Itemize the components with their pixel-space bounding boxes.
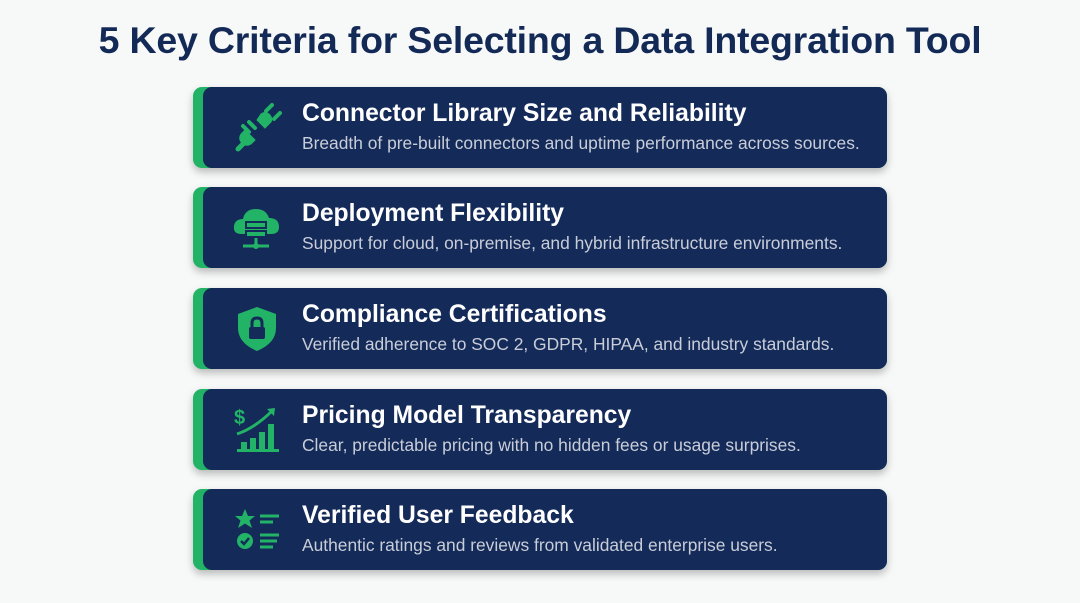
- heading: Verified User Feedback: [302, 502, 574, 529]
- title: 5 Key Criteria for Selecting a Data Integration Tool: [99, 19, 981, 61]
- description: Authentic ratings and reviews from validated enterprise users.: [302, 535, 778, 555]
- description: Breadth of pre-built connectors and uptime performance across sources.: [302, 133, 860, 153]
- description: Verified adherence to SOC 2, GDPR, HIPAA, and industry standards.: [302, 334, 834, 354]
- icon: cloud server: [234, 209, 279, 249]
- heading: Deployment Flexibility: [302, 200, 564, 227]
- card: connector library: [193, 87, 887, 168]
- description: Clear, predictable pricing with no hidden fees or usage surprises.: [302, 435, 801, 455]
- icon: dollar chart: [234, 407, 279, 452]
- heading: Compliance Certifications: [302, 301, 607, 328]
- card: feedback: [193, 489, 887, 570]
- heading: Pricing Model Transparency: [302, 402, 631, 429]
- card: compliance: [193, 288, 887, 369]
- card: deployment: [193, 187, 887, 268]
- heading: Connector Library Size and Reliability: [302, 100, 746, 127]
- icon: shield lock: [238, 307, 276, 351]
- icon: dollar chart: $: [234, 407, 245, 429]
- icon: star and check list: [235, 509, 279, 549]
- description: Support for cloud, on-premise, and hybrid infrastructure environments.: [302, 233, 842, 253]
- card: pricing: [193, 389, 887, 470]
- icon: plug: [236, 102, 282, 152]
